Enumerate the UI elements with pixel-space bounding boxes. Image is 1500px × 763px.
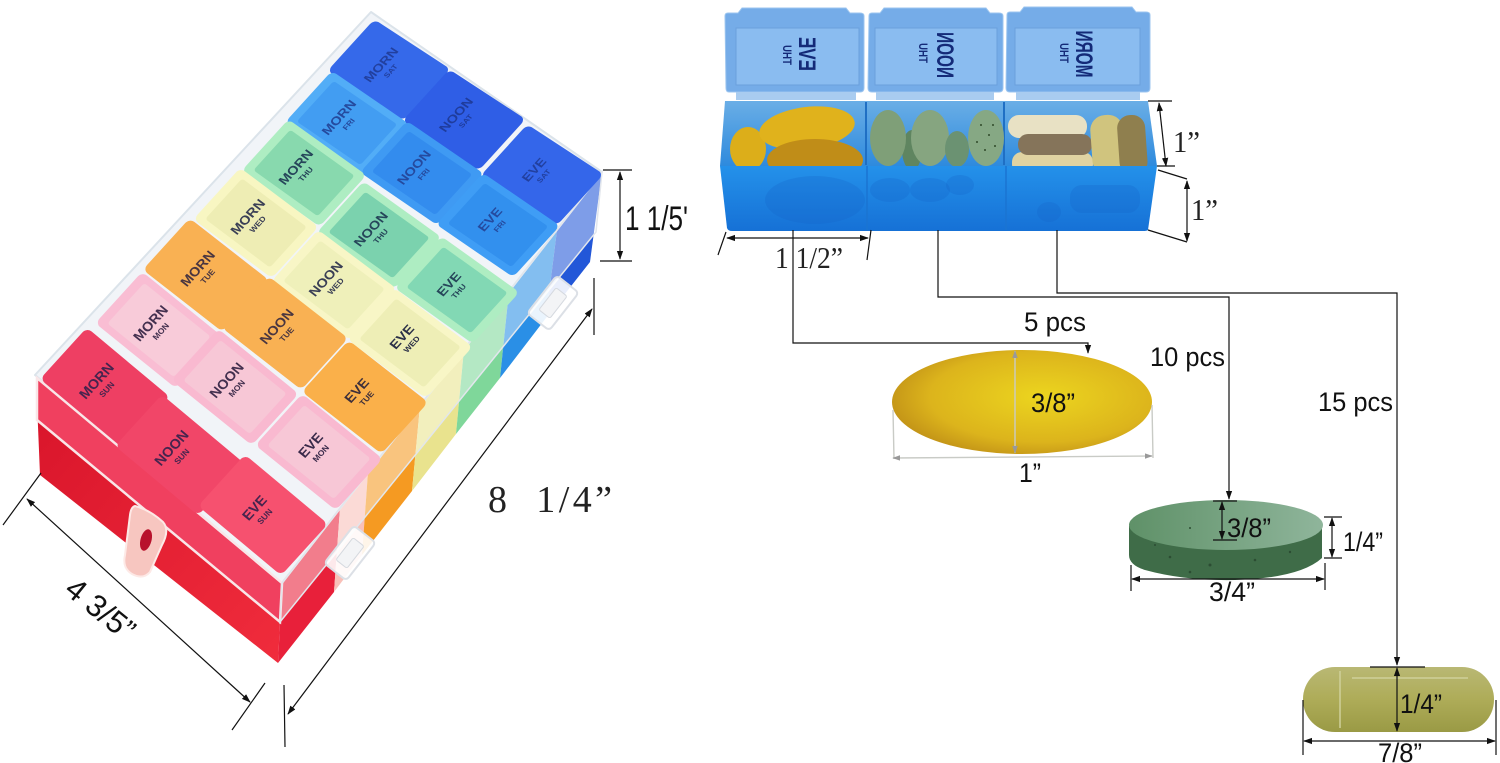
row: Saturday compartments: SAT xyxy=(535,168,553,184)
row: Tuesday compartments: EVE xyxy=(342,376,372,406)
dimension: compartment depth 1 inch xyxy=(1148,101,1200,166)
leader: capsules xyxy=(1057,230,1397,665)
dimension: length 8 1/4 inch xyxy=(284,278,612,747)
row: Monday compartments: MORN xyxy=(130,302,171,344)
row: Sunday compartments: EVE xyxy=(239,492,270,523)
tablet with dimensions: 3/8” xyxy=(1227,513,1271,543)
dimension: width 4 3/5 inch xyxy=(3,473,265,730)
row: Sunday compartments: MORN xyxy=(76,360,117,402)
row: Wednesday compartments: WED xyxy=(402,334,422,354)
row: Tuesday compartments: TUE xyxy=(199,267,217,285)
dimension: compartment width 1 1/2 inch: 1 1/2” xyxy=(775,240,843,275)
row: Thursday compartments: THU xyxy=(297,165,315,183)
faint pill shadows through wall xyxy=(765,175,1140,224)
lid side latch back xyxy=(527,275,579,331)
label: 10 pcs: 10 pcs xyxy=(1150,342,1225,372)
dimension: compartment height 1 inch xyxy=(1148,170,1218,242)
row: Wednesday compartments xyxy=(193,168,473,398)
row: Monday compartments xyxy=(95,272,383,510)
row: Monday compartments: MON xyxy=(151,322,171,342)
capsule with dimensions: 1/4” xyxy=(1400,689,1442,719)
row: Wednesday compartments: MORN xyxy=(228,197,268,237)
label: 5 pcs: 5 pcs xyxy=(1024,307,1086,337)
lid: NOON xyxy=(868,8,1003,92)
tray interior xyxy=(720,101,1157,166)
row: Tuesday compartments xyxy=(143,218,428,454)
row: Sunday compartments xyxy=(40,328,328,575)
hinges between lids and tray xyxy=(736,92,1140,100)
clear lid front band xyxy=(37,378,282,622)
row: Friday compartments: FRI xyxy=(492,219,508,234)
row: Friday compartments xyxy=(285,71,560,277)
row: Saturday compartments xyxy=(327,19,604,226)
row: Tuesday compartments: TUE xyxy=(278,325,296,343)
row: Sunday compartments: SUN xyxy=(255,507,275,526)
row: Sunday compartments: SUN xyxy=(97,380,117,399)
dimension: width 4 3/5 inch: 4 3/5” xyxy=(59,571,142,648)
photo: rainbow weekly pill organizer xyxy=(35,12,604,663)
dimension: height 1 1/5 inch: 1 1/5' xyxy=(625,200,688,238)
row: Wednesday compartments: WED xyxy=(248,214,268,234)
lid: EVE xyxy=(725,8,864,92)
capsules in tray xyxy=(1008,114,1148,166)
clasp tab xyxy=(124,506,166,577)
row: Monday compartments: EVE xyxy=(295,430,326,461)
dimension: length 8 1/4 inch: 8 1/4” xyxy=(488,479,612,521)
softgel with dimensions: 3/8” xyxy=(1031,388,1075,418)
leader: tablets xyxy=(938,230,1229,499)
capsule with dimensions xyxy=(1303,667,1496,763)
row: Friday compartments: FRI xyxy=(416,167,432,182)
dimension: compartment height 1 inch: 1” xyxy=(1191,192,1218,227)
row: Sunday compartments: NOON xyxy=(151,427,192,469)
lid: MORN: THU xyxy=(1057,43,1071,63)
row: Tuesday compartments: NOON xyxy=(257,306,297,347)
row: Friday compartments: MORN xyxy=(319,98,359,138)
row: Tuesday compartments: MORN xyxy=(178,248,218,289)
row: Wednesday compartments: NOON xyxy=(306,259,346,299)
lid: MORN xyxy=(1006,7,1150,92)
row: Thursday compartments: EVE xyxy=(434,270,464,299)
lid side latch front xyxy=(324,525,376,581)
row: Saturday compartments: SAT xyxy=(382,63,400,79)
row: Friday compartments: NOON xyxy=(394,148,434,187)
lid: EVE: THU xyxy=(780,45,794,65)
lid: EVE: EVE xyxy=(793,37,820,71)
row: Thursday compartments: THU xyxy=(372,227,390,245)
row: Wednesday compartments: EVE xyxy=(387,322,417,352)
row: Monday compartments: MON xyxy=(227,379,247,399)
tray front wall xyxy=(720,166,1157,231)
row: Thursday compartments: NOON xyxy=(351,209,391,249)
dimension: compartment width 1 1/2 inch xyxy=(718,230,871,275)
leader: softgels xyxy=(793,230,1088,353)
lid: MORN: MORN xyxy=(1070,30,1097,78)
row: Friday compartments: FRI xyxy=(341,117,357,132)
base front face xyxy=(36,378,282,663)
tablet with dimensions xyxy=(1129,500,1383,607)
row: Saturday compartments: SAT xyxy=(457,113,475,129)
row: Thursday compartments: THU xyxy=(450,282,468,300)
dimension: height 1 1/5 inch xyxy=(600,170,688,261)
row: Monday compartments: MON xyxy=(311,444,331,464)
row: Saturday compartments: MORN xyxy=(361,45,401,85)
softgel with dimensions xyxy=(892,350,1153,488)
row: Wednesday compartments: WED xyxy=(326,276,346,296)
clear lid top xyxy=(35,12,602,583)
base side colour strips xyxy=(278,172,602,663)
row: Monday compartments: NOON xyxy=(206,359,247,401)
clear lid side band xyxy=(280,172,602,622)
row: Saturday compartments: EVE xyxy=(519,155,550,184)
dimension: compartment depth 1 inch: 1” xyxy=(1173,124,1200,159)
lid: NOON: THU xyxy=(916,43,930,63)
row: Tuesday compartments: TUE xyxy=(358,389,376,407)
label: 15 pcs: 15 pcs xyxy=(1318,387,1393,417)
tablet with dimensions: 3/4” xyxy=(1209,577,1255,607)
row: Friday compartments: EVE xyxy=(475,205,505,234)
tablet with dimensions: 1/4” xyxy=(1343,527,1383,557)
lid: NOON: NOON xyxy=(931,32,958,78)
row: Sunday compartments: SUN xyxy=(172,447,192,466)
row: Saturday compartments: NOON xyxy=(436,95,476,134)
photo: single-day open tray xyxy=(720,7,1157,231)
softgels in tray xyxy=(730,106,863,166)
row: Thursday compartments xyxy=(242,119,519,344)
tablets in tray xyxy=(870,110,1004,170)
softgel with dimensions: 1” xyxy=(1019,458,1041,488)
row: Thursday compartments: MORN xyxy=(276,147,316,187)
